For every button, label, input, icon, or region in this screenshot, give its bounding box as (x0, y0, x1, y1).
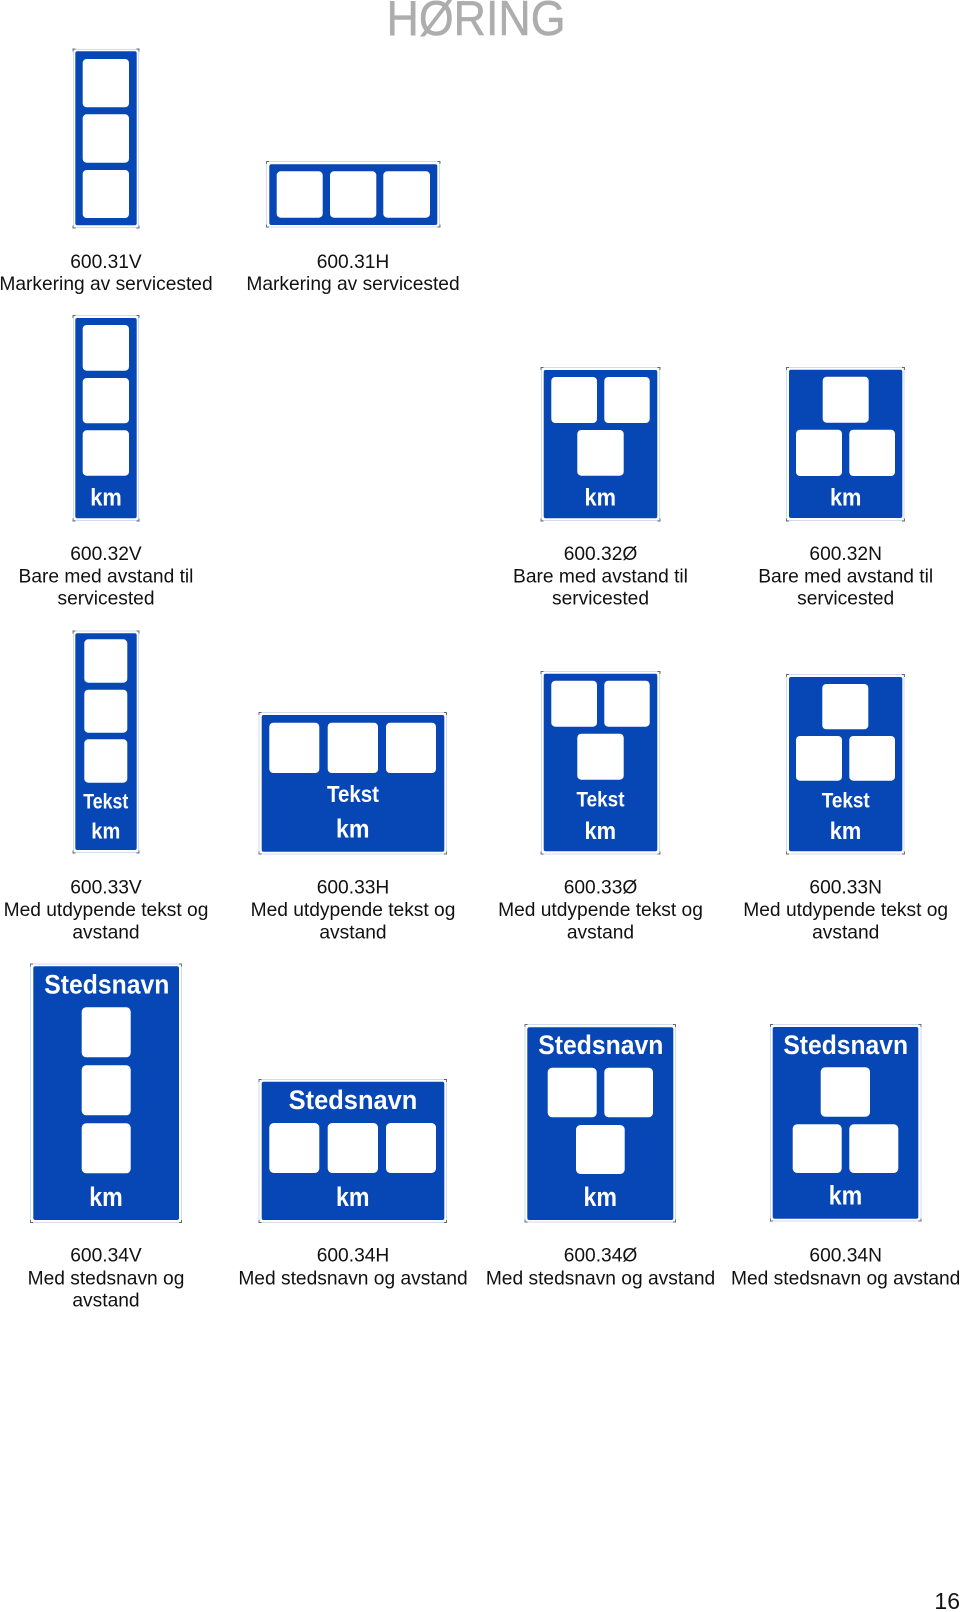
sign 600.33V (73, 631, 139, 853)
caption 600.33Ø: 600.33Ø (564, 877, 637, 898)
caption 600.33V: Med utdypende tekst og (4, 900, 208, 921)
caption 600.32V: Bare med avstand til (19, 566, 193, 587)
sign 600.32V: km (90, 486, 122, 512)
caption 600.32V: 600.32V (70, 544, 142, 565)
caption 600.34V: Med stedsnavn og (28, 1268, 184, 1289)
caption 600.34H (238, 1246, 468, 1289)
caption 600.34N: 600.34N (809, 1246, 882, 1267)
sign 600.33Ø (541, 672, 660, 854)
caption 600.32Ø (513, 544, 688, 610)
sign 600.33N: Tekst (822, 790, 870, 813)
caption 600.33V (4, 877, 208, 943)
caption 600.32V (19, 544, 193, 610)
caption 600.34N (731, 1246, 960, 1289)
sign 600.34Ø: km (584, 1182, 617, 1212)
caption 600.34Ø (486, 1246, 715, 1289)
sign 600.32N (786, 368, 904, 521)
caption 600.34H: 600.34H (317, 1246, 389, 1267)
caption 600.32N: Bare med avstand til (758, 566, 933, 587)
caption 600.32N: 600.32N (809, 544, 882, 565)
caption 600.34N: Med stedsnavn og avstand (731, 1268, 960, 1289)
sign 600.34N: Stedsnavn (783, 1030, 908, 1060)
sign 600.34H: km (336, 1182, 370, 1212)
sign 600.34V (30, 964, 182, 1222)
sign 600.34V: Stedsnavn (44, 969, 169, 999)
sign 600.34V: km (89, 1182, 123, 1212)
caption 600.31V (0, 252, 213, 295)
caption 600.34Ø: Med stedsnavn og avstand (486, 1268, 715, 1289)
sign 600.33V: km (91, 818, 120, 843)
sign 600.33N (786, 674, 904, 854)
caption 600.33Ø (498, 877, 703, 943)
sign 600.34H: Stedsnavn (289, 1085, 417, 1115)
caption 600.32N: servicested (797, 588, 894, 610)
caption 600.33H: Med utdypende tekst og (251, 900, 455, 921)
sign 600.33Ø: km (585, 819, 616, 845)
sign 600.34N (770, 1024, 921, 1221)
caption 600.31H (246, 252, 460, 295)
caption 600.33H: avstand (319, 922, 387, 943)
caption 600.32Ø: Bare med avstand til (513, 566, 688, 587)
sign 600.32Ø: km (585, 486, 616, 512)
caption 600.34V: 600.34V (70, 1246, 142, 1267)
sign 600.33H: Tekst (327, 781, 379, 807)
sign 600.34Ø: Stedsnavn (538, 1030, 663, 1060)
caption 600.31V: Markering av servicested (0, 274, 213, 295)
caption 600.33N: 600.33N (809, 877, 882, 898)
sign 600.34H (259, 1080, 446, 1222)
sign 600.33V: Tekst (83, 790, 128, 813)
caption 600.33Ø: Med utdypende tekst og (498, 900, 703, 921)
sign 600.31H (266, 162, 440, 227)
sign 600.34Ø (525, 1024, 676, 1222)
caption 600.32Ø: servicested (552, 588, 649, 610)
sign 600.32Ø (541, 368, 660, 521)
sign 600.34N: km (829, 1181, 862, 1211)
caption 600.33N: avstand (812, 922, 879, 943)
caption 600.32N (758, 544, 933, 610)
sign 600.33Ø: Tekst (576, 789, 624, 812)
caption 600.33H: 600.33H (317, 877, 389, 898)
sign 600.31V (73, 49, 139, 228)
caption 600.34Ø: 600.34Ø (564, 1246, 637, 1267)
caption 600.33V: avstand (72, 922, 140, 943)
sign 600.33H (259, 712, 446, 854)
caption 600.33Ø: avstand (567, 922, 634, 943)
caption 600.31H: Markering av servicested (246, 274, 460, 295)
caption 600.31V: 600.31V (70, 252, 142, 273)
caption 600.31H: 600.31H (317, 252, 389, 273)
sign 600.32N: km (830, 485, 861, 511)
caption 600.33H (251, 877, 455, 943)
caption 600.33N (743, 877, 948, 943)
caption 600.32Ø: 600.32Ø (564, 544, 637, 565)
caption 600.34H: Med stedsnavn og avstand (238, 1268, 468, 1289)
caption 600.34V: avstand (72, 1291, 140, 1312)
sign 600.33N: km (830, 819, 861, 845)
caption 600.32V: servicested (57, 588, 155, 610)
sign 600.32V (73, 316, 139, 521)
caption 600.34V (28, 1246, 184, 1312)
sign 600.33H: km (336, 815, 370, 843)
caption 600.33N: Med utdypende tekst og (743, 900, 948, 921)
caption 600.33V: 600.33V (70, 877, 142, 898)
